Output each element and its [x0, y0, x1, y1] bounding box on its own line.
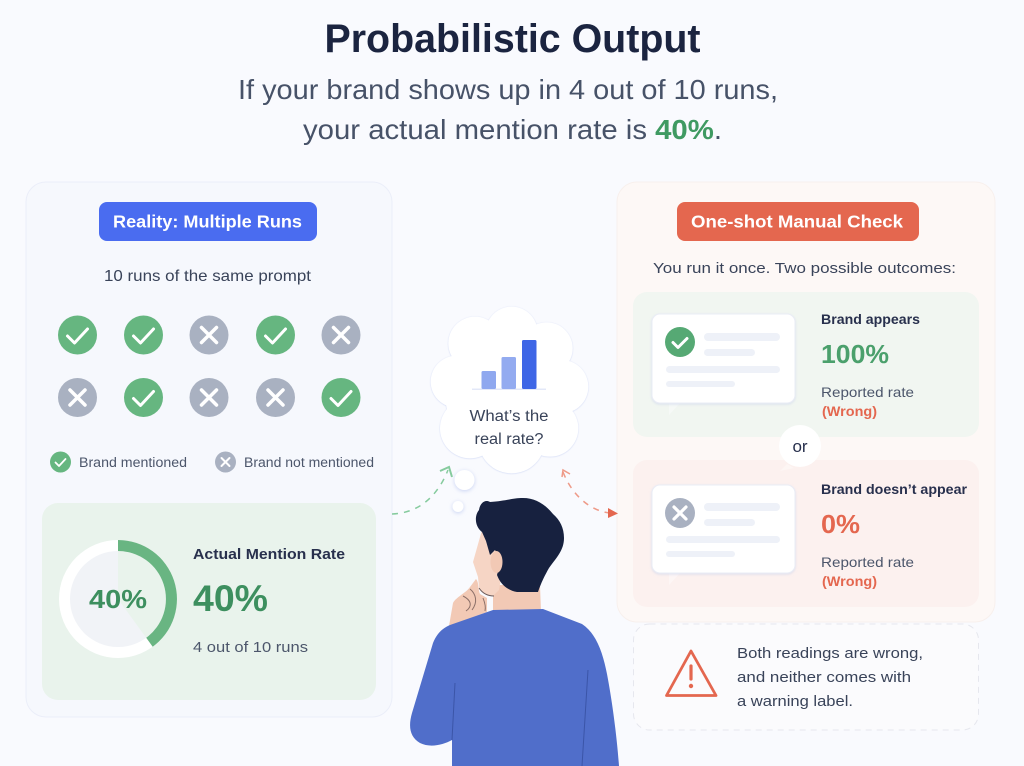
legend	[50, 452, 374, 472]
sweater	[410, 609, 619, 766]
subtitle	[238, 74, 778, 145]
outcome: brand does not appear	[633, 460, 979, 607]
text: brand appears result	[821, 311, 920, 419]
hair	[476, 498, 564, 592]
text: warning message: Both readings are wrong,	[737, 645, 923, 662]
sleeve folds	[452, 670, 588, 766]
heading badge: reality: Reality: Multiple Runs	[113, 212, 302, 232]
thought bubbles	[452, 470, 474, 512]
heading badge: reality	[99, 202, 317, 241]
text: what's the real rate: real rate?	[474, 431, 544, 448]
outcome: brand appears	[633, 292, 979, 437]
icon grid: ten runs	[58, 316, 360, 417]
neck	[493, 585, 541, 612]
ear	[490, 551, 502, 573]
text: brand does not appear result: Brand doesn’t appear	[821, 481, 968, 497]
text: brand does not appear result	[821, 481, 968, 589]
legend: Brand mentioned	[79, 455, 187, 470]
panel: actual mention rate	[42, 503, 376, 700]
text: warning message	[737, 645, 923, 710]
panel: one-shot manual check	[617, 182, 995, 622]
text: brand appears result: Brand appears	[821, 311, 920, 327]
text: brand appears result: 100%	[821, 339, 889, 369]
text: warning message: a warning label.	[737, 693, 853, 710]
arrow: green dashed to thought cloud	[392, 467, 452, 514]
donut chart: 40 percent	[59, 540, 177, 658]
heading badge: one-shot	[677, 202, 919, 241]
text: outcomes caption: You run it once. Two possible outcomes:	[653, 260, 956, 277]
card: chat result with cross	[652, 485, 795, 585]
hand	[449, 579, 487, 626]
subtitle: If your brand shows up in 4 out of 10 runs,	[238, 74, 778, 105]
icon: bar chart	[472, 340, 546, 390]
text: brand does not appear result: (Wrong)	[822, 574, 877, 589]
jaw line	[479, 588, 494, 596]
text: brand appears result: (Wrong)	[822, 404, 877, 419]
title: Probabilistic Output	[324, 17, 700, 61]
callout: warning	[634, 624, 978, 730]
text: actual mention rate	[193, 546, 345, 656]
text: brand does not appear result: 0%	[821, 509, 860, 539]
legend: Brand not mentioned	[244, 455, 374, 470]
text: brand does not appear result: Reported rate	[821, 554, 914, 570]
card: chat result with check	[652, 314, 795, 415]
text: actual mention rate: 40%	[193, 578, 268, 619]
icon: warning triangle	[666, 651, 716, 696]
text: what's the real rate: What’s the	[470, 408, 548, 425]
text: actual mention rate: 4 out of 10 runs	[193, 639, 308, 656]
or bubble: or	[792, 437, 808, 456]
heading badge: one-shot: One-shot Manual Check	[691, 212, 903, 232]
thought cloud	[431, 307, 588, 473]
text: actual mention rate: Actual Mention Rate	[193, 546, 345, 563]
text: warning message: and neither comes with	[737, 669, 911, 686]
fingers	[463, 589, 485, 611]
text: runs caption: 10 runs of the same prompt	[104, 268, 312, 285]
donut chart: 40 percent: 40%	[89, 584, 147, 614]
text: brand appears result: Reported rate	[821, 384, 914, 400]
person thinking	[410, 498, 619, 766]
text: what's the real rate	[470, 408, 548, 448]
or bubble	[779, 425, 821, 471]
subtitle: your actual mention rate is 40%.	[303, 114, 722, 145]
panel: reality multiple runs	[26, 182, 392, 717]
face	[473, 530, 505, 596]
arrow: red dashed to manual check	[562, 470, 618, 518]
